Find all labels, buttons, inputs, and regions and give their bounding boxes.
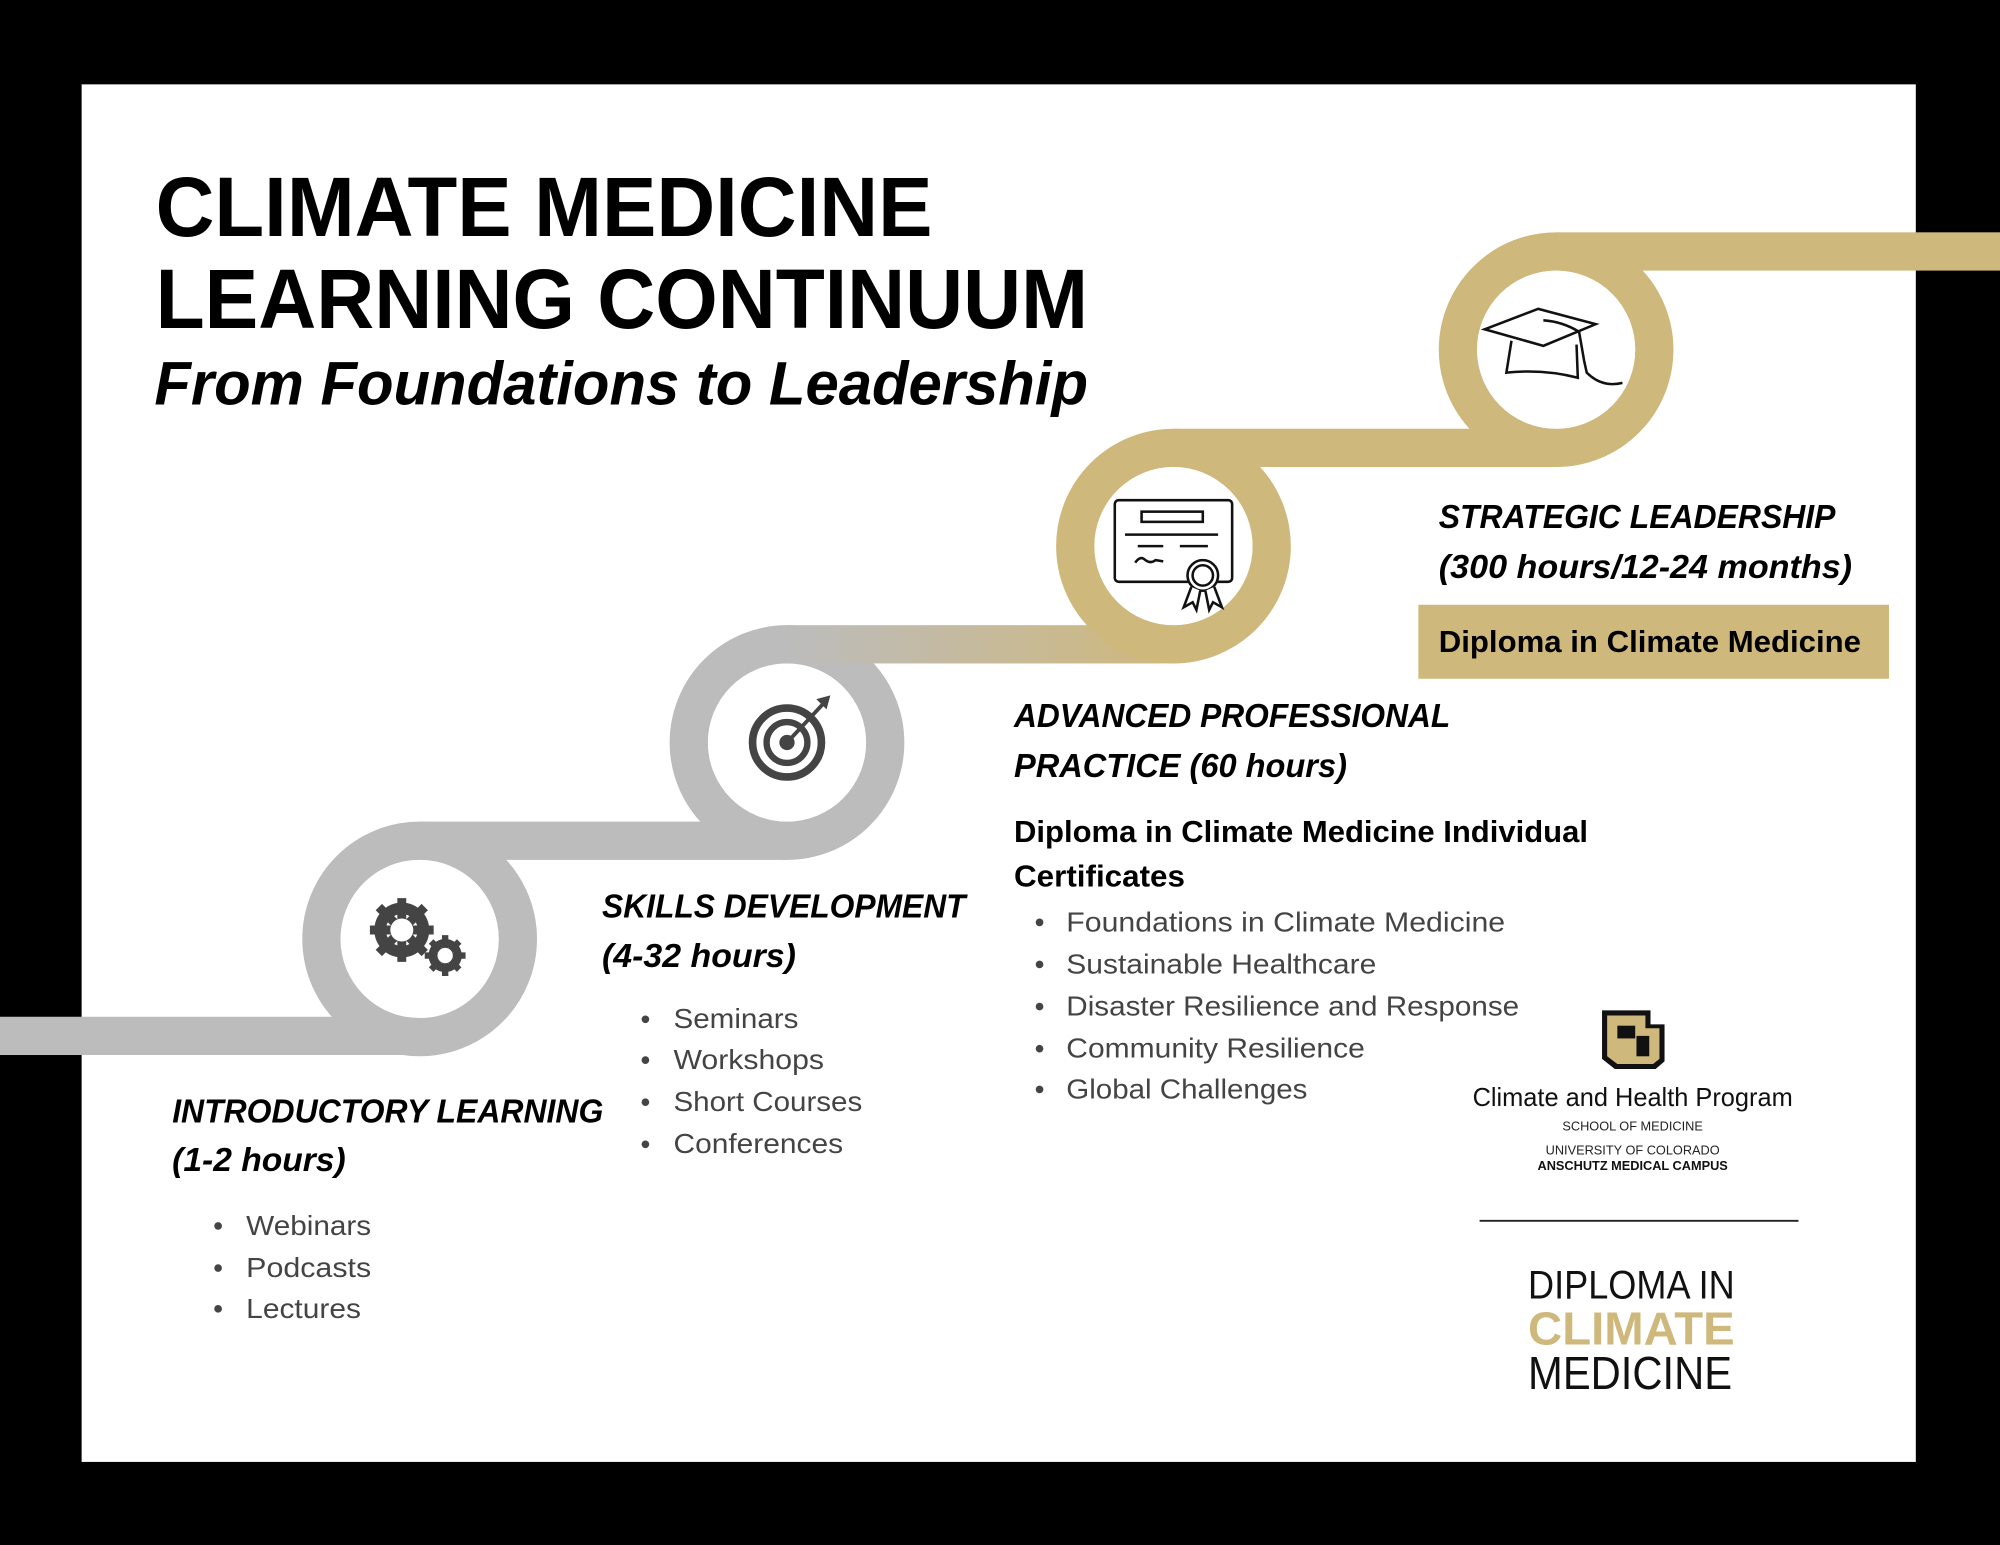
logo: CU Climate and Health Program: UNIVERSITY OF COLORADO: [1546, 1143, 1720, 1158]
title: CLIMATE MEDICINE: [156, 160, 932, 254]
logo: Diploma in Climate Medicine: CLIMATE: [1528, 1303, 1735, 1355]
text block: advanced professional practice: Sustainable Healthcare: [1066, 948, 1376, 979]
logo: Diploma in Climate Medicine: [1528, 1264, 1735, 1399]
logo: CU Climate and Health Program: ANSCHUTZ MEDICAL CAMPUS: [1537, 1158, 1728, 1173]
text block: advanced professional practice: Disaster Resilience and Response: [1066, 990, 1519, 1021]
text block: advanced professional practice: Global Challenges: [1066, 1073, 1307, 1104]
title: [154, 160, 1088, 418]
callout: diploma box: Diploma in Climate Medicine: [1439, 625, 1861, 659]
text block: skills development: Workshops: [673, 1044, 824, 1075]
text block: introductory learning: Webinars: [246, 1210, 371, 1241]
text block: introductory learning: INTRODUCTORY LEARNING: [172, 1094, 603, 1131]
text block: advanced professional practice: Community Resilience: [1066, 1033, 1365, 1064]
text block: advanced professional practice: Diploma in Climate Medicine Individual: [1014, 815, 1588, 849]
callout: diploma box: [1418, 605, 1889, 679]
title: LEARNING CONTINUUM: [156, 252, 1088, 346]
text block: advanced professional practice: ADVANCED PROFESSIONAL: [1013, 698, 1450, 735]
text block: advanced professional practice: [1013, 698, 1588, 1104]
text block: advanced professional practice: PRACTICE (60 hours): [1014, 748, 1347, 785]
text block: skills development: Conferences: [673, 1128, 843, 1159]
text block: skills development: Short Courses: [673, 1086, 862, 1117]
icon: target: [753, 695, 830, 777]
logo: Diploma in Climate Medicine: DIPLOMA IN: [1528, 1264, 1735, 1308]
logo: Diploma in Climate Medicine: MEDICINE: [1528, 1347, 1732, 1399]
text block: advanced professional practice: Foundations in Climate Medicine: [1066, 906, 1505, 937]
path: continuum road: [0, 232, 2000, 1055]
text block: skills development: SKILLS DEVELOPMENT: [602, 888, 968, 925]
text block: strategic leadership: [1439, 499, 1852, 586]
logo: CU Climate and Health Program: Climate and Health Program: [1473, 1084, 1793, 1112]
text block: introductory learning: (1-2 hours): [172, 1142, 346, 1179]
icon: gears: [370, 898, 466, 976]
logo: CU Climate and Health Program: SCHOOL OF MEDICINE: [1562, 1118, 1703, 1133]
text block: skills development: Seminars: [673, 1003, 798, 1034]
icon: graduation cap: [1485, 309, 1622, 384]
icon: certificate: [1115, 500, 1232, 610]
logo: CU Climate and Health Program: [1473, 1010, 1793, 1173]
text block: introductory learning: [172, 1094, 603, 1324]
text block: strategic leadership: STRATEGIC LEADERSHIP: [1439, 499, 1836, 536]
text block: skills development: (4-32 hours): [602, 938, 796, 975]
title: From Foundations to Leadership: [154, 350, 1088, 418]
text block: skills development: [602, 888, 968, 1159]
text block: advanced professional practice: Certificates: [1014, 860, 1185, 894]
text block: introductory learning: Podcasts: [246, 1252, 371, 1283]
text block: introductory learning: Lectures: [246, 1293, 361, 1324]
text block: strategic leadership: (300 hours/12-24 months): [1439, 549, 1852, 586]
